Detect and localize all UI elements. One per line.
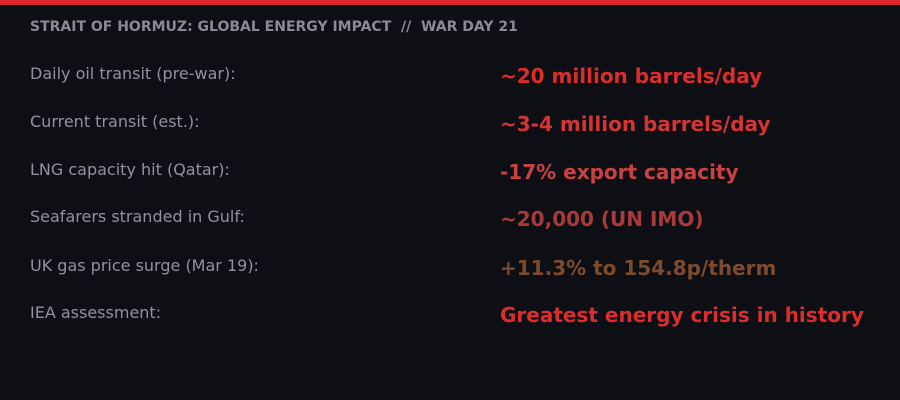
label: daily oil: Daily oil transit (pre-war): xyxy=(30,64,236,83)
value: LNG: -17% export capacity xyxy=(500,160,739,184)
label: IEA: IEA assessment: xyxy=(30,303,161,322)
label: UK gas: UK gas price surge (Mar 19): xyxy=(30,256,259,275)
label: current transit: Current transit (est.): xyxy=(30,112,200,131)
value: IEA: Greatest energy crisis in history xyxy=(500,303,864,327)
value: seafarers: ~20,000 (UN IMO) xyxy=(500,207,703,231)
value: current transit: ~3-4 million barrels/day xyxy=(500,112,770,136)
label: LNG: LNG capacity hit (Qatar): xyxy=(30,160,230,179)
title: STRAIT OF HORMUZ: GLOBAL ENERGY IMPACT // WAR DAY 21 xyxy=(30,19,518,35)
label: seafarers: Seafarers stranded in Gulf: xyxy=(30,207,245,226)
value: daily oil: ~20 million barrels/day xyxy=(500,64,762,88)
value: UK gas: +11.3% to 154.8p/therm xyxy=(500,256,776,280)
